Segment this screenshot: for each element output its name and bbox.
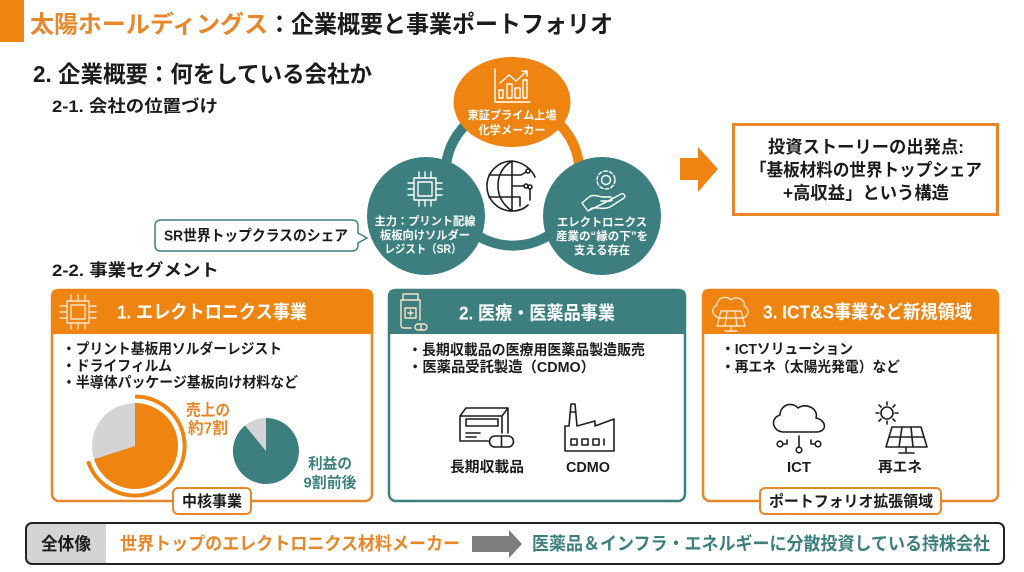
node: electronics industry: [543, 157, 661, 275]
heading: 2-1: 2-1. 会社の位置づけ: [52, 97, 218, 116]
callout: investment story: +高収益」という構造: [783, 183, 949, 203]
panel: ICT and new fields: [702, 289, 999, 514]
icon: cloud and solar: [713, 297, 748, 331]
node: main product SR: [367, 157, 485, 275]
callout: investment story: 「基板材料の世界トップシェア: [750, 160, 982, 180]
summary bar: [26, 523, 1004, 564]
badge: core business: [173, 488, 251, 514]
list: electronics: ・プリント基板用ソルダーレジスト: [62, 340, 282, 358]
list: ICT: ・ICTソリューション: [721, 342, 853, 358]
list: medical: ・長期収載品の医療用医薬品製造販売: [408, 341, 645, 359]
node: TSE prime: 化学メーカー: [478, 123, 546, 137]
node: main product SR: 主力：プリント配線: [374, 214, 476, 228]
heading: electronics: 1. エレクトロニクス事業: [117, 302, 307, 322]
list: ICT: [721, 342, 900, 376]
icon: digital globe: [487, 161, 535, 211]
callout: investment story: 投資ストーリーの出発点:: [768, 137, 964, 157]
icon: long-listed drug box: [460, 408, 514, 447]
callout: SR share: [155, 220, 367, 251]
icon: solar panel: [876, 402, 927, 453]
icon: factory: [565, 404, 614, 451]
badge: core business: 中核事業: [182, 492, 242, 510]
list: electronics: ・半導体パッケージ基板向け材料など: [62, 374, 298, 392]
arrow: transition: [472, 530, 522, 558]
label: profit share: 9割前後: [304, 474, 356, 492]
title: 太陽ホールディングス: [30, 10, 268, 38]
badge: portfolio expansion: ポートフォリオ拡張領域: [769, 492, 933, 510]
panel: electronics: [51, 289, 373, 514]
chart: profit share pie: [233, 418, 299, 484]
heading: ICT: 3. ICT&S事業など新規領域: [763, 302, 972, 322]
label: sales share: 売上の: [186, 402, 230, 420]
icon: medicine bottle: [401, 294, 427, 330]
list: electronics: [62, 340, 298, 392]
list: ICT: ・再エネ（太陽光発電）など: [721, 358, 900, 376]
diagram: company position cycle: [367, 57, 661, 275]
label: ICT: ICT: [787, 460, 811, 476]
list: medical: [408, 341, 645, 376]
title: ：企業概要と事業ポートフォリオ: [268, 12, 613, 38]
node: electronics industry: エレクトロニクス: [557, 216, 647, 229]
ring segments: [446, 121, 579, 246]
icon: cloud: [774, 404, 824, 447]
label: renewable energy: 再エネ: [878, 459, 922, 476]
title: [0, 0, 613, 42]
node: electronics industry: 支える存在: [574, 243, 630, 257]
node: electronics industry: 産業の“縁の下”を: [556, 229, 648, 243]
list: electronics: ・ドライフィルム: [62, 358, 172, 375]
label: sales share: 約7割: [188, 420, 228, 438]
callout: SR share: SR世界トップクラスのシェア: [164, 228, 348, 244]
label: profit share: [304, 456, 356, 492]
arrow: to investment story: [680, 147, 718, 192]
label: CDMO: CDMO: [566, 460, 610, 476]
node: main product SR: レジスト（SR）: [384, 242, 462, 256]
panel: medical: [388, 289, 686, 501]
node: TSE prime: [454, 57, 570, 147]
text: materials maker: 世界トップのエレクトロニクス材料メーカー: [120, 534, 460, 554]
label: profit share: 利益の: [308, 456, 352, 472]
text: holding company: 医薬品＆インフラ・エネルギーに分散投資している持株会社: [532, 534, 990, 554]
icon: chip: [60, 295, 96, 329]
heading: medical: 2. 医療・医薬品事業: [459, 302, 615, 324]
heading: 2-2: 2-2. 事業セグメント: [52, 260, 219, 280]
label: sales share: [186, 402, 230, 438]
chart: sales share pie: [88, 396, 185, 495]
label: long-listed drugs: 長期収載品: [450, 458, 524, 476]
label: overview: 全体像: [41, 534, 91, 554]
node: TSE prime: 東証プライム上場: [468, 108, 557, 122]
badge: portfolio expansion: [760, 488, 941, 514]
callout: investment story: [734, 124, 998, 214]
heading: section 2: 2. 企業概要：何をしている会社か: [33, 61, 372, 87]
node: main product SR: 板板向けソルダー: [380, 228, 470, 242]
list: medical: ・医薬品受託製造（CDMO）: [408, 358, 595, 376]
